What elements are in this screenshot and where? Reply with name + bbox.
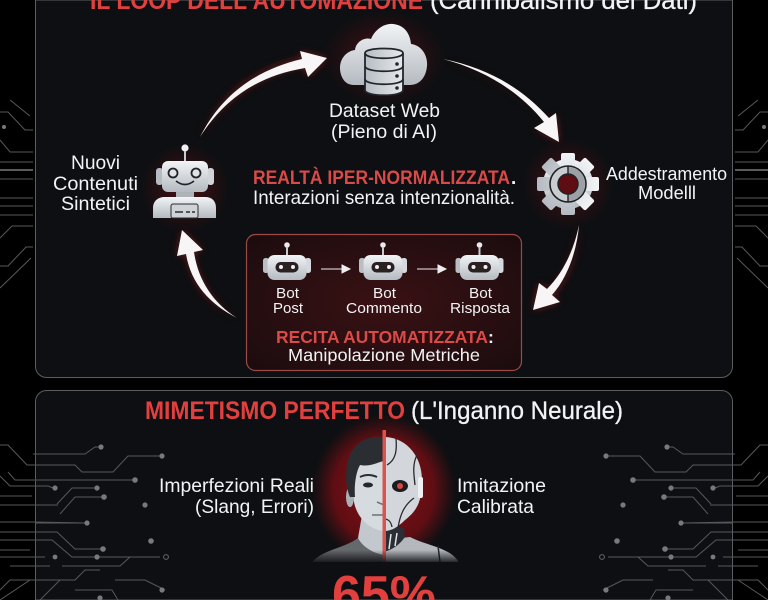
label: calibrated imitation [457, 475, 546, 518]
label: training: Addestramento [606, 163, 727, 184]
label: bot post [273, 285, 304, 317]
label: new synthetic contents: Nuovi [71, 152, 120, 174]
label: new synthetic contents: Contenuti [53, 173, 138, 195]
text: automated performance caption: RECITA AUTOMATIZZATA [276, 327, 488, 347]
arrow: robot to dataset [200, 51, 327, 137]
heading: mimicry title: (L'Inganno Neurale) [411, 397, 623, 425]
circuit decoration: upper left [0, 100, 33, 288]
text: automated performance caption: Manipolazione Metriche [288, 345, 480, 365]
arrow: post to comment [321, 265, 350, 273]
heading: loop title [90, 0, 697, 15]
callout: hyper-normalised reality: . [511, 168, 516, 189]
illustration: half human half robot face [305, 414, 465, 566]
label: bot comment: Bot [373, 285, 397, 302]
icon: friendly robot [140, 143, 230, 233]
icon: gear [522, 138, 614, 230]
heading: mimicry title [145, 397, 623, 425]
label: training: Modelll [638, 182, 696, 203]
arrow: bot box to robot [177, 230, 237, 318]
label: new synthetic contents [53, 152, 138, 215]
label: real imperfections: (Slang, Errori) [195, 496, 314, 518]
text: automated performance caption: : [488, 327, 494, 347]
icon: cloud database [322, 10, 446, 106]
arrow: comment to reply [417, 265, 446, 273]
circuit decoration: lower right [600, 444, 768, 600]
panel: automation loop [36, 0, 732, 378]
label: real imperfections [159, 475, 314, 518]
circuit decoration: lower left [0, 444, 168, 600]
icon: bot post [263, 242, 311, 280]
callout: hyper-normalised reality [253, 167, 516, 209]
panel: perfect mimicry [0, 390, 768, 600]
label: calibrated imitation: Calibrata [457, 496, 534, 518]
panel: automated performance [246, 234, 522, 370]
callout: hyper-normalised reality: Interazioni senza intenzionalità. [253, 187, 515, 209]
label: bot reply: Risposta [450, 300, 511, 317]
text: automated performance caption [276, 327, 494, 365]
label: new synthetic contents: Sintetici [61, 193, 130, 215]
arrow: training to bot box [533, 225, 579, 310]
label: bot comment [346, 285, 422, 317]
label: bot post: Bot [276, 285, 300, 302]
label: bot comment: Commento [346, 300, 422, 317]
label: bot reply [450, 285, 511, 317]
label: bot post: Post [273, 300, 304, 317]
label: dataset web: (Pieno di AI) [331, 121, 437, 143]
circuit decoration: upper right [735, 100, 768, 288]
icon: bot comment [359, 242, 407, 280]
label: training [606, 163, 727, 203]
arrow: dataset to training [443, 59, 559, 142]
label: dataset web: Dataset Web [329, 100, 440, 122]
callout: hyper-normalised reality: REALTÀ IPER-NORMALIZZATA [253, 167, 510, 189]
label: bot reply: Bot [469, 285, 493, 302]
label: real imperfections: Imperfezioni Reali [159, 475, 314, 497]
label: dataset web [329, 100, 440, 143]
label: calibrated imitation: Imitazione [457, 475, 546, 497]
icon: bot reply [456, 242, 504, 280]
heading: mimicry title: MIMETISMO PERFETTO [145, 397, 405, 425]
